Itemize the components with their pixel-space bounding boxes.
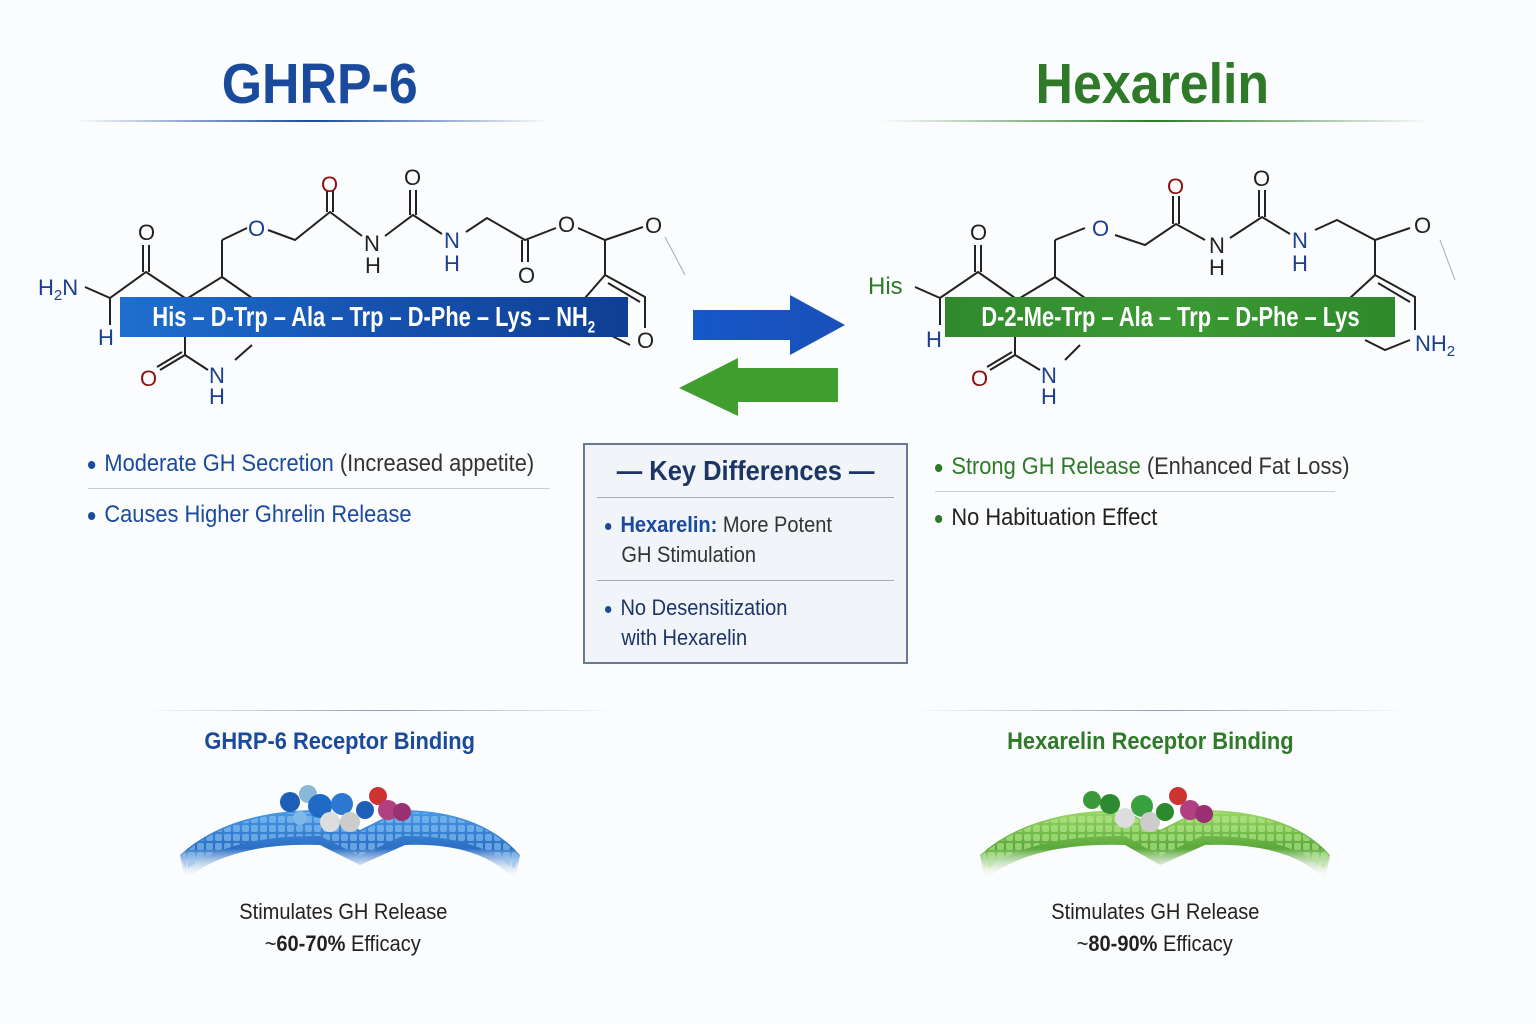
banner: GHRP-6 sequence: His – D-Trp – Ala – Trp – D-Phe – Lys – NH2 [153,301,595,337]
structure: GHRP-6: O [645,213,662,238]
heading: key differences: — Key Differences — [617,455,874,486]
structure: Hexarelin: H [1292,251,1308,276]
caption: GHRP-6 efficacy: ~60-70% Efficacy [265,931,421,956]
structure: GHRP-6: O [140,366,157,391]
structure: GHRP-6: O [248,216,265,241]
structure: GHRP-6 [38,165,686,409]
structure: Hexarelin: O [1414,213,1431,238]
structure: GHRP-6: H [209,384,225,409]
structure: Hexarelin: O [1167,174,1184,199]
panel: key differences: No Desensitization [620,595,787,620]
structure: Hexarelin: N [1209,233,1225,258]
panel: key differences [583,443,908,664]
structure: GHRP-6: N [364,231,380,256]
panel: key differences: with Hexarelin [621,625,747,650]
structure: GHRP-6: O [138,220,155,245]
structure: GHRP-6: O [637,328,654,353]
structure: Hexarelin: O [1092,216,1109,241]
structure: Hexarelin: H [1209,255,1225,280]
arrow: blue right [693,295,845,355]
structure: Hexarelin: N [1292,228,1308,253]
panel: key differences: Hexarelin: More Potent [620,512,832,537]
banner: Hexarelin sequence [945,297,1395,337]
structure: GHRP-6: H [38,275,54,300]
structure: GHRP-6: N [444,228,460,253]
structure: Hexarelin [868,166,1456,409]
structure: Hexarelin: H [926,327,942,352]
caption: GHRP-6 efficacy [239,899,447,956]
structure: GHRP-6: H [365,253,381,278]
bullets: Hexarelin: Strong GH Release (Enhanced Fat Loss) [951,453,1350,480]
caption: Hexarelin efficacy: Stimulates GH Release [1051,899,1259,924]
bullets: GHRP-6: Causes Higher Ghrelin Release [104,501,412,528]
caption: Hexarelin efficacy [1051,899,1259,956]
structure: Hexarelin: H [1041,384,1057,409]
structure: GHRP-6: O [321,172,338,197]
title: Hexarelin: Hexarelin [1036,52,1269,116]
illustration: GHRP-6 membrane [180,785,520,874]
arrow: green left [679,358,838,416]
caption: GHRP-6 efficacy: Stimulates GH Release [239,899,447,924]
structure: GHRP-6: N [62,275,78,300]
structure: Hexarelin: O [1253,166,1270,191]
structure: Hexarelin: 2 [1447,343,1455,360]
structure: GHRP-6: N [209,363,225,388]
structure: GHRP-6: O [404,165,421,190]
bullets: Hexarelin [935,453,1350,531]
structure: Hexarelin: O [970,220,987,245]
structure: Hexarelin: His [868,273,903,300]
illustration: Hexarelin membrane [980,787,1330,874]
bullets: GHRP-6: Moderate GH Secretion (Increased appetite) [104,450,534,477]
structure: GHRP-6: H [444,251,460,276]
heading: Hexarelin receptor binding: Hexarelin Receptor Binding [1007,728,1293,755]
structure: Hexarelin: O [971,366,988,391]
bullets: Hexarelin: No Habituation Effect [951,504,1157,531]
bullets: GHRP-6 [88,450,550,528]
structure: GHRP-6: 2 [54,287,62,304]
heading: GHRP-6 receptor binding: GHRP-6 Receptor Binding [205,728,475,755]
structure: GHRP-6: O [558,212,575,237]
panel: key differences: GH Stimulation [621,542,756,567]
title: GHRP-6: GHRP-6 [222,52,418,116]
structure: Hexarelin: N [1041,363,1057,388]
structure: GHRP-6: H [98,325,114,350]
caption: Hexarelin efficacy: ~80-90% Efficacy [1077,931,1233,956]
structure: Hexarelin: NH [1415,331,1447,356]
structure: GHRP-6: O [518,263,535,288]
banner: Hexarelin sequence: D-2-Me-Trp – Ala – Trp – D-Phe – Lys [981,301,1359,332]
